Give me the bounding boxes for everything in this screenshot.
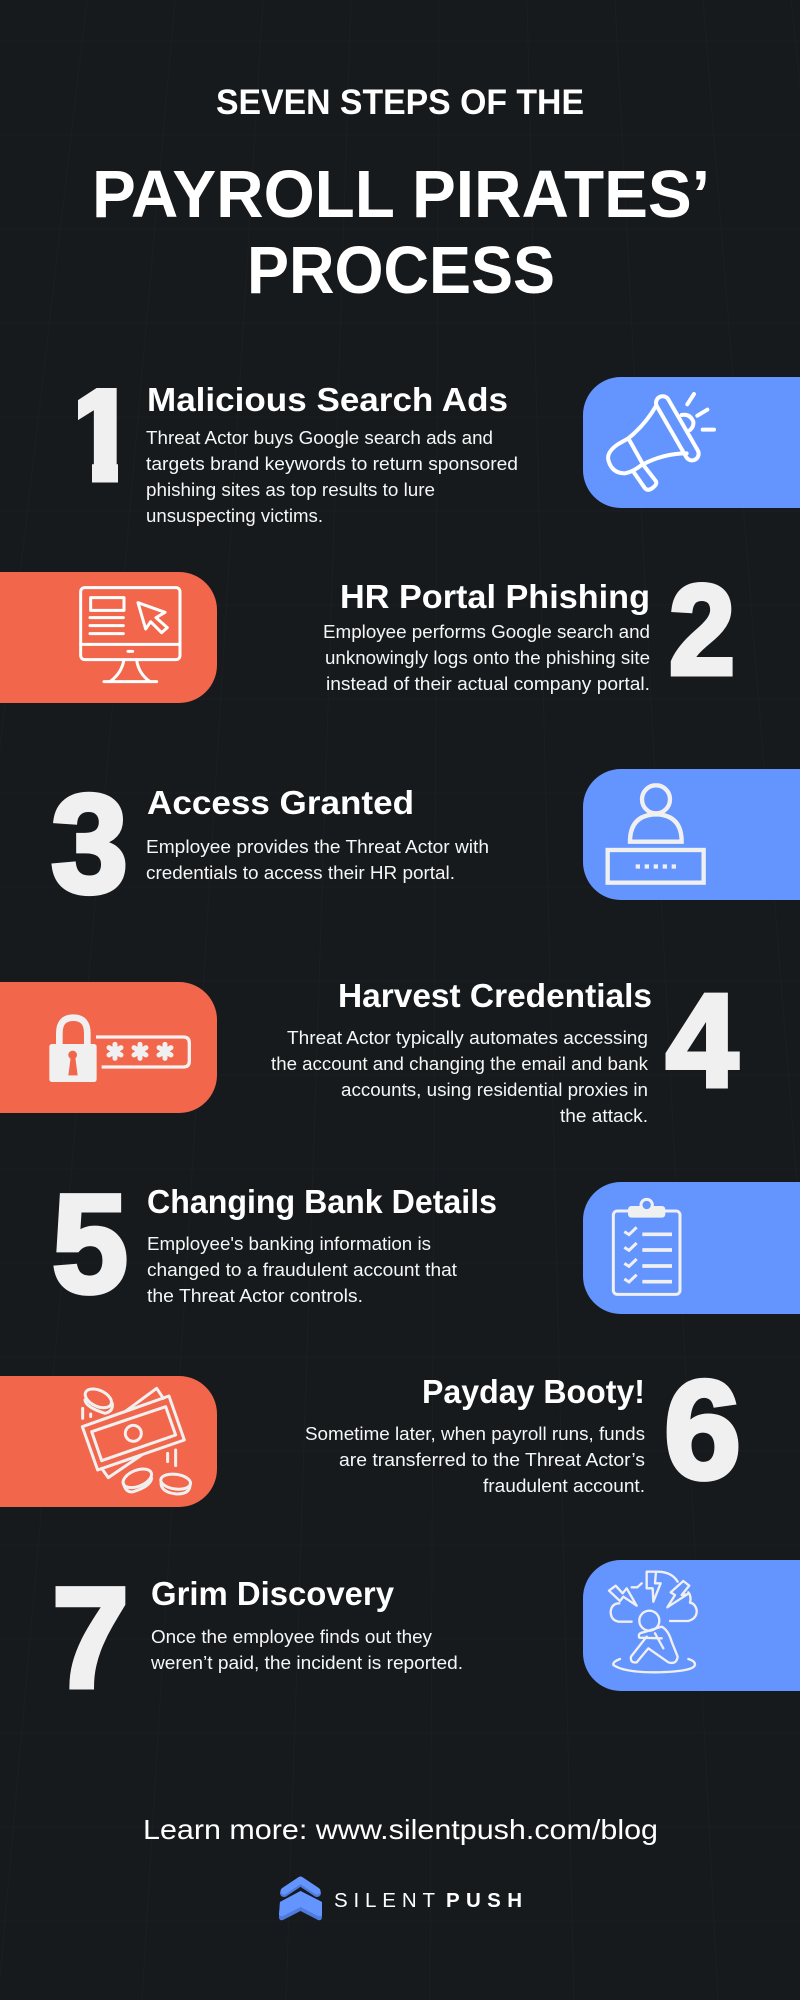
description 3 [146, 836, 489, 883]
number 7: 7 [52, 1559, 129, 1718]
card: red 4 [0, 982, 217, 1113]
description 7: Once the employee finds out they [151, 1626, 433, 1647]
card: blue 1 [583, 377, 800, 508]
step 3: access granted [51, 765, 800, 922]
title: PROCESS [247, 233, 555, 308]
icon: megaphone [608, 394, 714, 490]
icon: money and coins [82, 1385, 192, 1494]
card: red 2 [0, 572, 217, 703]
description 6 [305, 1423, 645, 1496]
logo wordmark [334, 1889, 522, 1912]
logo: silent push [279, 1880, 522, 1920]
card: red 6 [0, 1376, 217, 1507]
step 7: grim discovery [52, 1559, 800, 1718]
description 1: unsuspecting victims. [146, 505, 323, 526]
heading 5: Changing Bank Details [147, 1183, 497, 1220]
heading 6: Payday Booty! [422, 1373, 645, 1410]
title: SEVEN STEPS OF THE [216, 83, 584, 122]
logo mark [279, 1880, 322, 1920]
description 5: changed to a fraudulent account that [147, 1259, 457, 1280]
logo wordmark: SILENT [334, 1889, 435, 1912]
number 3: 3 [51, 765, 128, 922]
icon: user at password field [608, 785, 704, 883]
card: blue 5 [583, 1182, 800, 1314]
footer link: Learn more: www.silentpush.com/blog [143, 1814, 658, 1845]
description 3: Employee provides the Threat Actor with [146, 836, 489, 857]
description 6: fraudulent account. [483, 1475, 645, 1496]
icon: monitor with cursor [81, 588, 180, 682]
description 5 [147, 1233, 457, 1306]
description 4 [271, 1027, 649, 1126]
description 3: credentials to access their HR portal. [146, 862, 455, 883]
step 4: harvest credentials [0, 967, 738, 1126]
description 6: Sometime later, when payroll runs, funds [305, 1423, 645, 1444]
description 1 [146, 427, 518, 526]
number 1: 1 [66, 362, 138, 508]
card: blue 3 [583, 769, 800, 900]
number 4: 4 [666, 967, 738, 1114]
step 1: malicious search ads [78, 377, 800, 526]
number 5: 5 [52, 1165, 128, 1322]
description 2: unknowingly logs onto the phishing site [325, 647, 650, 668]
description 7: weren’t paid, the incident is reported. [150, 1652, 463, 1673]
heading 1: Malicious Search Ads [147, 381, 508, 418]
heading 3: Access Granted [147, 784, 414, 821]
description 2: Employee performs Google search and [323, 621, 650, 642]
heading 4: Harvest Credentials [338, 977, 652, 1014]
heading 7: Grim Discovery [151, 1575, 395, 1612]
icon: padlock and password [49, 1018, 189, 1082]
description 2 [323, 621, 650, 694]
number 6: 6 [664, 1351, 741, 1508]
title [92, 83, 710, 308]
icon: clipboard checklist [613, 1199, 680, 1294]
description 5: the Threat Actor controls. [147, 1285, 363, 1306]
description 7 [150, 1626, 463, 1673]
step 5: changing bank details [52, 1165, 800, 1322]
description 5: Employee's banking information is [147, 1233, 431, 1254]
description 6: are transferred to the Threat Actor’s [339, 1449, 645, 1470]
description 1: targets brand keywords to return sponsored [146, 453, 518, 474]
description 4: the account and changing the email and bank [271, 1053, 649, 1074]
description 1: phishing sites as top results to lure [146, 479, 435, 500]
description 4: accounts, using residential proxies in [341, 1079, 648, 1100]
heading 2: HR Portal Phishing [340, 578, 650, 615]
icon: distressed person [609, 1572, 697, 1672]
description 2: instead of their actual company portal. [326, 673, 650, 694]
description 1: Threat Actor buys Google search ads and [146, 427, 493, 448]
step 6: payday booty [0, 1351, 741, 1508]
card: blue 7 [583, 1560, 800, 1691]
logo wordmark: PUSH [446, 1889, 522, 1912]
title: PAYROLL PIRATES’ [92, 157, 710, 232]
description 4: Threat Actor typically automates accessing [287, 1027, 648, 1048]
number 2: 2 [669, 559, 735, 702]
description 4: the attack. [560, 1105, 648, 1126]
step 2: HR portal phishing [0, 559, 735, 703]
